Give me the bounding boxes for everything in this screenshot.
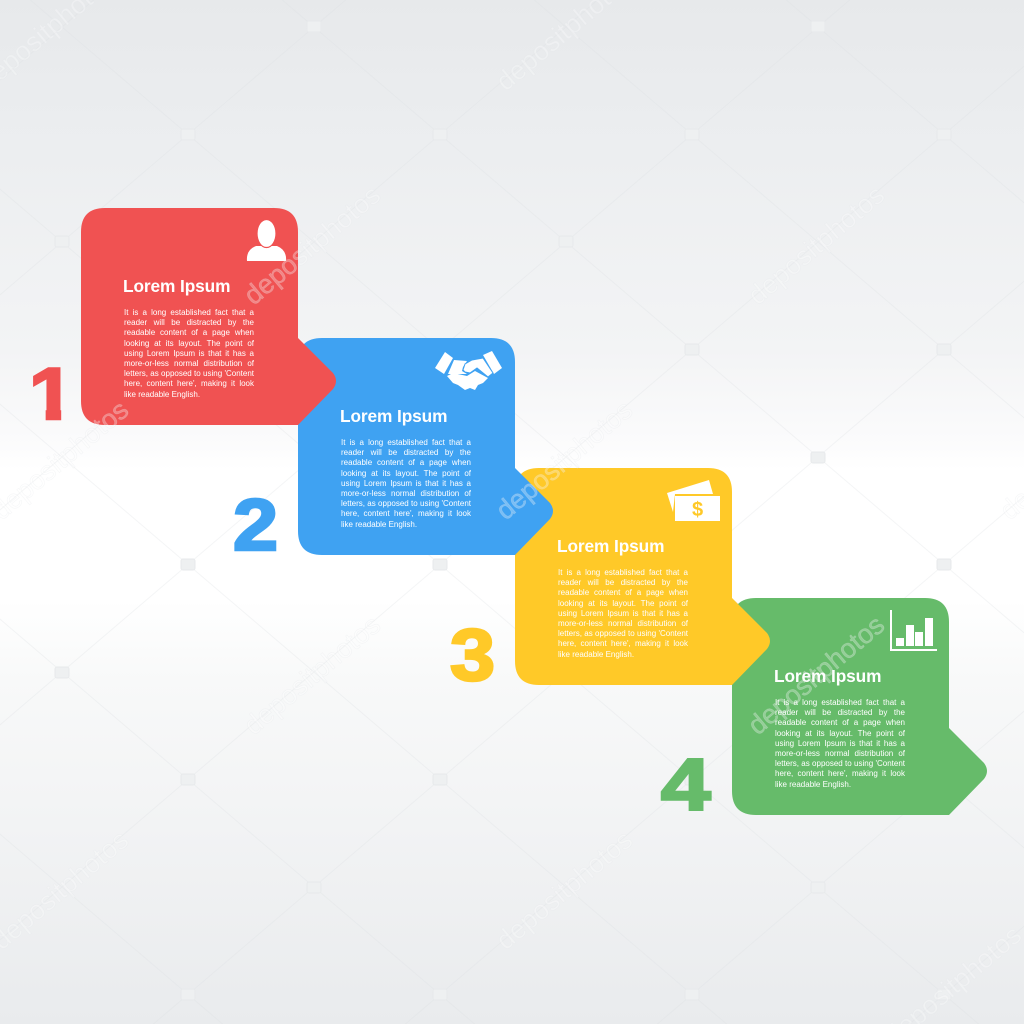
number 3: 3 [450, 615, 495, 696]
panel: step 2 blue: like readable English. [341, 520, 417, 528]
number 1: 1 [29, 354, 74, 435]
panel: step 2 blue: Lorem Ipsum [340, 406, 447, 426]
panel: step 1 red: Lorem Ipsum [123, 276, 230, 296]
panel: step 1 red: like readable English. [124, 390, 200, 398]
panel: step 1 red [81, 208, 336, 425]
panel: step 2 blue: here, content here', making it look [341, 509, 471, 518]
panel: step 4 green: readable content of a page when [775, 718, 905, 727]
panel: step 3 yellow: like readable English. [558, 650, 634, 658]
panel: step 2 blue [298, 338, 553, 555]
panel: step 3 yellow: looking at its layout. The point of [558, 599, 688, 608]
panel: step 2 blue: letters, as opposed to using 'Content [341, 499, 471, 508]
panel: step 3 yellow: Lorem Ipsum [557, 536, 664, 556]
panel: step 4 green: here, content here', making it look [775, 769, 905, 778]
panel: step 4 green: using Lorem Ipsum is that it has a [775, 739, 905, 748]
panel: step 4 green: It is a long established fact that a [775, 698, 905, 707]
number 4: 4 [661, 745, 711, 826]
panel: step 3 yellow: using Lorem Ipsum is that it has a [558, 609, 688, 618]
panel: step 1 red: letters, as opposed to using 'Content [124, 369, 254, 378]
panel: step 2 blue: looking at its layout. The point of [341, 469, 471, 478]
panel: step 3 yellow: more-or-less normal distribution of [558, 619, 688, 628]
panel: step 4 green: letters, as opposed to using 'Content [775, 759, 905, 768]
number 2: 2 [233, 485, 278, 566]
panel: step 4 green: reader will be distracted by the [775, 708, 905, 717]
panel: step 3 yellow: readable content of a page when [558, 588, 688, 597]
panel: step 3 yellow: $ [692, 499, 703, 521]
panel: step 3 yellow [515, 468, 770, 685]
panel: step 3 yellow: It is a long established fact that a [558, 568, 688, 577]
watermarks: depositphotos [238, 180, 386, 311]
watermarks: depositphotos [238, 610, 386, 741]
panel: step 1 red: here, content here', making it look [124, 379, 254, 388]
panel: step 4 green: looking at its layout. The point of [775, 729, 905, 738]
panel: step 1 red: readable content of a page when [124, 328, 254, 337]
panel: step 1 red: looking at its layout. The point of [124, 339, 254, 348]
panel: step 1 red: reader will be distracted by the [124, 318, 254, 327]
watermarks: depositphotos [490, 395, 638, 526]
panel: step 2 blue: more-or-less normal distribution of [341, 489, 471, 498]
panel: step 1 red: more-or-less normal distribution of [124, 359, 254, 368]
panel: step 4 green: more-or-less normal distribution of [775, 749, 905, 758]
panel: step 2 blue: readable content of a page when [341, 458, 471, 467]
watermarks: depositphotos [742, 180, 890, 311]
panel: step 3 yellow: here, content here', making it look [558, 639, 688, 648]
panel: step 4 green [732, 598, 987, 815]
panel: step 4 green: Lorem Ipsum [774, 666, 881, 686]
panel: step 2 blue: It is a long established fact that a [341, 438, 471, 447]
watermarks: depositphotos [490, 825, 638, 956]
panel: step 1 red: It is a long established fact that a [124, 308, 254, 317]
watermarks: depositphotos [742, 610, 890, 741]
panel: step 2 blue: reader will be distracted by the [341, 448, 471, 457]
panel: step 2 blue: using Lorem Ipsum is that it has a [341, 479, 471, 488]
panel: step 4 green: like readable English. [775, 780, 851, 788]
panel: step 1 red: using Lorem Ipsum is that it has a [124, 349, 254, 358]
panel: step 3 yellow: letters, as opposed to using 'Content [558, 629, 688, 638]
panel: step 3 yellow: reader will be distracted by the [558, 578, 688, 587]
